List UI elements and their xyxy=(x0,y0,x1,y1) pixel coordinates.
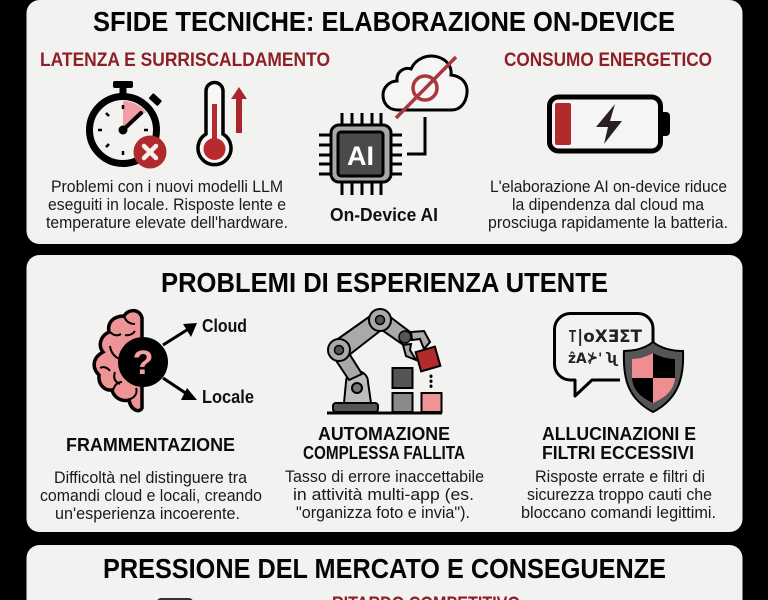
subheading: automazione xyxy=(303,423,465,463)
text: frammentazione: comandi cloud e locali, creando xyxy=(40,487,262,505)
subheading: automazione: COMPLESSA FALLITA xyxy=(303,442,465,463)
icon: shield xyxy=(624,342,683,412)
arrow: to locale xyxy=(163,378,197,400)
text: consumo: prosciuga rapidamente la batteria. xyxy=(488,214,728,232)
label: cloud: Cloud xyxy=(202,316,247,336)
heading: pressione del mercato: PRESSIONE DEL MERCATO E CONSEGUENZE xyxy=(103,553,666,584)
panel: sfide tecniche xyxy=(26,0,742,244)
icon: thermometer xyxy=(198,82,247,165)
icon: AI chip xyxy=(319,113,402,195)
icon: speech bubble with garbled text: ⊺|oXƎΣT xyxy=(568,327,642,347)
icon: brain with question: ? xyxy=(133,344,153,382)
icon: crossed cloud xyxy=(383,56,467,154)
icon: robot arm xyxy=(327,309,442,413)
text: allucinazioni: Risposte errate e filtri di xyxy=(535,468,705,486)
subheading: allucinazioni xyxy=(542,423,696,463)
text: frammentazione: un'esperienza incoerente. xyxy=(55,505,240,523)
icon: stopwatch xyxy=(90,81,166,168)
arrow: to cloud xyxy=(163,323,197,345)
subheading: allucinazioni: FILTRI ECCESSIVI xyxy=(542,442,694,463)
subheading: consumo: CONSUMO ENERGETICO xyxy=(504,49,712,71)
text: automazione: "organizza foto e invia"). xyxy=(296,504,470,522)
text: latenza: Problemi con i nuovi modelli LLM xyxy=(51,178,283,196)
heading: sfide tecniche: SFIDE TECNICHE: ELABORAZIONE ON-DEVICE xyxy=(93,6,675,37)
icon: brain with question xyxy=(94,311,168,411)
text: latenza xyxy=(46,178,288,232)
text: allucinazioni xyxy=(521,468,716,522)
icon: AI chip: AI xyxy=(347,141,374,171)
icon: speech bubble with garbled text xyxy=(554,314,653,396)
text: latenza: temperature elevate dell'hardware. xyxy=(46,214,288,232)
text: automazione: in attività multi-app (es. xyxy=(293,486,474,504)
icon: battery xyxy=(550,97,670,151)
icon: cut-off device xyxy=(157,598,193,600)
text: automazione: Tasso di errore inaccettabile xyxy=(285,468,484,486)
text: allucinazioni: sicurezza troppo cauti che xyxy=(527,486,712,504)
label: on-device AI: On-Device AI xyxy=(330,205,438,225)
text: consumo: L'elaborazione AI on-device riduce xyxy=(490,178,727,196)
text: allucinazioni: bloccano comandi legittimi. xyxy=(521,504,716,522)
subheading: allucinazioni: ALLUCINAZIONI E xyxy=(542,423,696,444)
text: frammentazione xyxy=(40,469,262,523)
label: locale: Locale xyxy=(202,387,254,407)
text: consumo: la dipendenza dal cloud ma xyxy=(512,196,705,214)
subheading: frammentazione: FRAMMENTAZIONE xyxy=(66,434,235,455)
icon: speech bubble with garbled text: ẑA⊁' ʯ xyxy=(568,351,619,367)
text: latenza: eseguiti in locale. Risposte lente e xyxy=(48,196,286,214)
heading: esperienza utente: PROBLEMI DI ESPERIENZA UTENTE xyxy=(161,267,608,298)
panel: esperienza utente xyxy=(26,255,742,532)
text: consumo xyxy=(488,178,728,232)
text: automazione xyxy=(285,468,484,522)
subheading: automazione: AUTOMAZIONE xyxy=(318,423,450,444)
panel: pressione del mercato xyxy=(26,545,742,600)
text: frammentazione: Difficoltà nel distinguere tra xyxy=(54,469,248,487)
subheading: latenza: LATENZA E SURRISCALDAMENTO xyxy=(40,49,330,71)
